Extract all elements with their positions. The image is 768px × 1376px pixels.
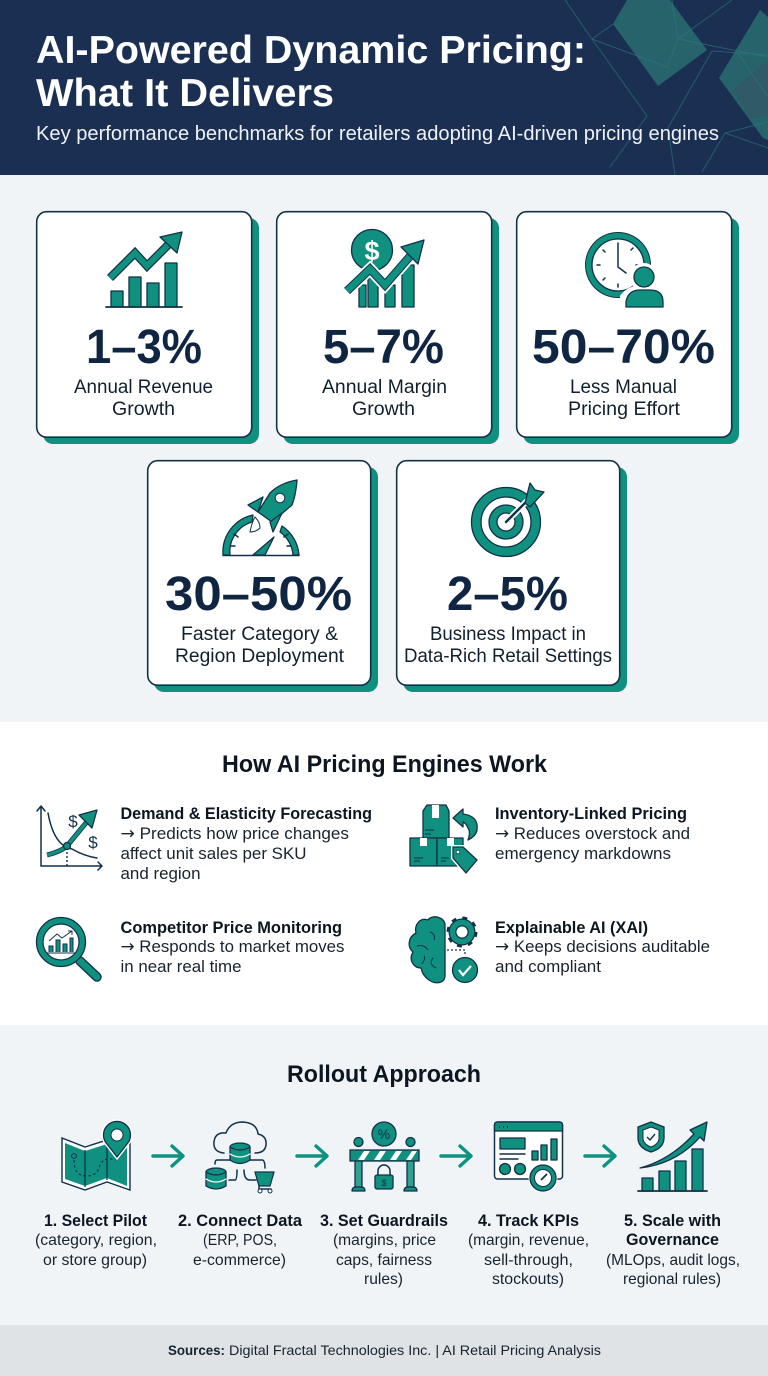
title: What It Delivers: [36, 72, 334, 115]
item: explainable AI: Explainable AI (XAI): [495, 918, 648, 937]
card: business impact: [397, 461, 627, 692]
header banner: [0, 0, 768, 175]
card: annual revenue growth: Growth: [112, 399, 175, 420]
step 4: track KPIs: sell-through,: [484, 1252, 573, 1269]
icon: barrier with percent and lock: %: [378, 1126, 390, 1142]
title: AI-Powered Dynamic Pricing:: [36, 29, 586, 72]
item: explainable AI: → Keeps decisions auditable: [495, 937, 710, 957]
item: demand and elasticity forecasting: and region: [120, 864, 200, 883]
heading: how AI pricing engines work: How AI Pricing Engines Work: [222, 751, 548, 778]
card: less manual pricing effort: 50–70%: [532, 321, 715, 374]
card: annual margin growth: [277, 212, 499, 444]
icon: barrier with percent and lock: [350, 1122, 419, 1191]
step 1: select pilot: (category, region,: [35, 1232, 157, 1249]
icon: map with pin: [62, 1121, 130, 1190]
icon: rising bars with shield: [638, 1122, 707, 1191]
step 2: connect data: 2. Connect Data: [178, 1211, 303, 1230]
item: demand and elasticity forecasting: Demand & Elasticity Forecasting: [120, 804, 372, 823]
step 1: select pilot: 1. Select Pilot: [44, 1211, 147, 1230]
arrow: step 2 to 3: [297, 1146, 327, 1166]
step 5: scale with governance: [606, 1122, 740, 1288]
title: [36, 29, 586, 115]
icon: barrier with percent and lock: $: [381, 1178, 387, 1188]
item: inventory-linked pricing: Inventory-Linked Pricing: [495, 804, 687, 823]
item: demand and elasticity forecasting: → Predicts how price changes: [120, 824, 349, 844]
icon: elasticity chart: $: [88, 833, 98, 852]
step 3: set guardrails: [320, 1122, 448, 1288]
icon: target with arrow: [472, 483, 544, 556]
card: annual revenue growth: Annual Revenue: [74, 377, 213, 398]
card: annual margin growth: 5–7%: [323, 321, 444, 374]
step 5: scale with governance: regional rules): [623, 1271, 721, 1288]
arrow: step 3 to 4: [441, 1146, 471, 1166]
icon: rocket over speedometer: [223, 480, 299, 556]
item: inventory-linked pricing: [410, 804, 690, 873]
item: inventory-linked pricing: → Reduces overstock and: [495, 824, 690, 844]
step 3: set guardrails: rules): [364, 1271, 403, 1288]
panel: benchmark background: [0, 175, 768, 722]
step 2: connect data: [178, 1122, 303, 1269]
item: demand and elasticity forecasting: [37, 804, 372, 883]
icon: elasticity chart: $: [68, 812, 78, 831]
arrow: step 4 to 5: [585, 1146, 615, 1166]
item: competitor price monitoring: → Responds to market moves: [120, 937, 344, 957]
step 2: connect data: e-commerce): [193, 1252, 286, 1269]
step 1: select pilot: [35, 1121, 157, 1269]
step 3: set guardrails: (margins, price: [333, 1232, 436, 1249]
step 5: scale with governance: Governance: [626, 1230, 719, 1249]
icon: boxes with tag and return arrow: [410, 805, 477, 873]
panel: rollout approach: [0, 1025, 768, 1325]
icon: elasticity chart: [37, 806, 102, 870]
step 5: scale with governance: (MLOps, audit logs,: [606, 1252, 740, 1269]
icon: cloud with databases and cart: [206, 1122, 274, 1193]
step 4: track KPIs: stockouts): [492, 1271, 564, 1288]
subtitle: Key performance benchmarks for retailers adopting AI-driven pricing engines: [36, 123, 719, 145]
card: business impact: Business Impact in: [430, 624, 586, 645]
item: competitor price monitoring: [36, 918, 344, 977]
card: business impact: Data-Rich Retail Settings: [404, 646, 612, 667]
icon: bar chart with arrow: [106, 232, 182, 307]
panel: how AI pricing engines work: [0, 722, 768, 1025]
heading: rollout approach: Rollout Approach: [287, 1061, 481, 1088]
step 4: track KPIs: 4. Track KPIs: [478, 1211, 579, 1230]
icon: dashboard with gauge: [494, 1122, 562, 1192]
item: inventory-linked pricing: emergency markdowns: [495, 844, 671, 863]
item: explainable AI: [409, 917, 710, 983]
icon: dollar coin with rising arrow: [347, 230, 424, 307]
card: less manual pricing effort: [517, 212, 739, 444]
step 3: set guardrails: 3. Set Guardrails: [320, 1211, 448, 1230]
card: faster deployment: Faster Category &: [181, 624, 338, 645]
arrow: step 1 to 2: [153, 1146, 183, 1166]
card: annual margin growth: Growth: [352, 399, 415, 420]
card: annual margin growth: Annual Margin: [322, 377, 447, 398]
icon: magnifier with chart: [36, 918, 97, 977]
item: competitor price monitoring: Competitor Price Monitoring: [120, 918, 342, 937]
card: less manual pricing effort: Less Manual: [570, 377, 677, 398]
card: faster deployment: 30–50%: [165, 568, 352, 621]
step 5: scale with governance: 5. Scale with: [624, 1211, 721, 1230]
step 4: track KPIs: (margin, revenue,: [468, 1232, 589, 1249]
icon: clock with person: [585, 232, 670, 312]
card: faster deployment: [148, 461, 378, 692]
item: demand and elasticity forecasting: affect unit sales per SKU: [120, 844, 306, 863]
item: explainable AI: and compliant: [495, 957, 601, 976]
card: business impact: 2–5%: [447, 568, 568, 621]
step 2: connect data: (ERP, POS,: [203, 1232, 277, 1249]
icon: brain gear and check: [409, 917, 478, 983]
step 1: select pilot: or store group): [43, 1252, 147, 1269]
icon: dollar coin with rising arrow: $: [364, 236, 380, 266]
card: annual revenue growth: 1–3%: [86, 321, 202, 374]
item: competitor price monitoring: in near real time: [120, 957, 242, 976]
card: annual revenue growth: [37, 212, 259, 444]
card: less manual pricing effort: Pricing Effort: [568, 399, 681, 420]
card: faster deployment: Region Deployment: [175, 646, 345, 667]
footer: sources: Sources:: [168, 1342, 225, 1358]
footer: sources: [0, 1325, 768, 1376]
step 4: track KPIs: [468, 1122, 589, 1288]
footer: sources: Digital Fractal Technologies Inc. | AI Retail Pricing Analysis: [229, 1342, 601, 1358]
step 3: set guardrails: caps, fairness: [336, 1252, 432, 1269]
